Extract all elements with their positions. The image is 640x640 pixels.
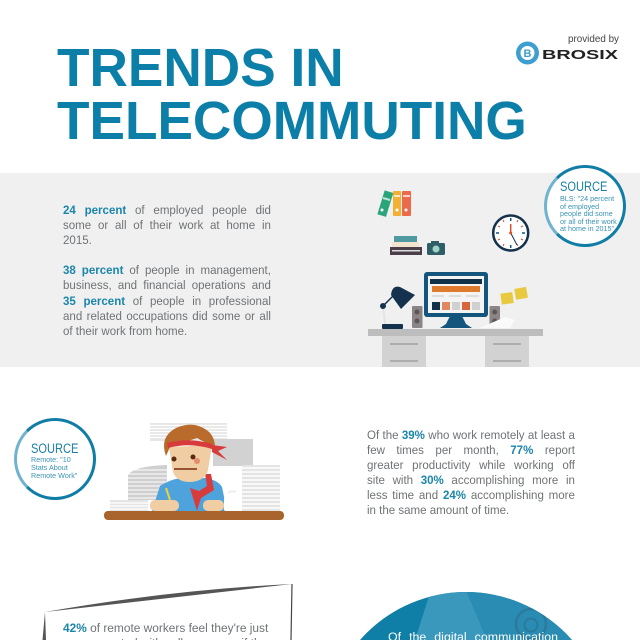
icon: desk lamp: [380, 287, 415, 329]
text block: 24 percent and 38 percent stats: [63, 203, 271, 338]
character head: [164, 425, 227, 482]
text block: 24 percent and 38 percent stats: some or all of their work at home in: [63, 218, 271, 232]
icon: computer monitor: [424, 272, 488, 328]
callout: source BLS: people did some: [560, 209, 613, 218]
text block: 39% productivity stats: site with 30% accomplishing more in: [367, 473, 575, 487]
desk top: [104, 511, 284, 520]
callout: source Remote: Remote Work": [31, 471, 77, 480]
callout: source Remote: SOURCE: [31, 441, 78, 456]
text block: 39% productivity stats: [367, 428, 575, 517]
callout: source Remote: Stats About: [31, 463, 68, 472]
callout: source BLS: or all of their work: [560, 216, 617, 226]
callout: source BLS: at home in 2015": [560, 224, 614, 233]
text block: 24 percent and 38 percent stats: 35 percent of people in professional: [63, 294, 271, 308]
icon: sticky notes: [500, 287, 528, 305]
logo: provided by Brosix: B: [524, 48, 532, 60]
character body: [150, 474, 227, 511]
title: TRENDS IN: [57, 38, 344, 98]
callout: source Remote: Remote: "10: [31, 455, 71, 464]
text block: 24 percent and 38 percent stats: 38 percent of people in management,: [63, 263, 271, 277]
paper stacks: [110, 423, 280, 511]
icon: binders: [377, 190, 411, 217]
coffee mug: [224, 491, 241, 511]
text block: 39% productivity stats: few times per month, 77% report: [367, 443, 575, 457]
illustration: office desk with monitor, shelves and clock: [368, 190, 543, 367]
text block: 24 percent and 38 percent stats: and related occupations did some or all: [63, 309, 271, 323]
text block: 24 percent and 38 percent stats: of their work from home.: [63, 324, 187, 338]
icon: paper on desk: [480, 317, 515, 328]
desk: [368, 329, 543, 367]
logo: provided by Brosix: BROSIX: [542, 47, 618, 62]
icon: wall clock: [493, 216, 528, 250]
title: TELECOMMUTING: [57, 90, 527, 150]
callout: source BLS: of employed: [560, 202, 599, 210]
text block: 24 percent and 38 percent stats: 24 percent of employed people did: [63, 203, 271, 217]
illustration: stressed worker at desk: [104, 423, 284, 520]
panel: paper card with 42% stat: [42, 584, 293, 640]
text block: 24 percent and 38 percent stats: business, and financial operations and: [63, 278, 271, 292]
logo: provided by Brosix: [516, 33, 620, 64]
text block: 39% productivity stats: in the same amount of time.: [367, 503, 509, 517]
title: [57, 38, 527, 150]
callout: source BLS: SOURCE: [560, 179, 607, 194]
text block: 39% productivity stats: less time and 24% accomplishing more: [367, 488, 575, 502]
text block: 39% productivity stats: Of the 39% who work remotely at least a: [367, 428, 575, 442]
band: grey section background: [0, 173, 640, 367]
callout: source BLS: BLS: "24 percent: [560, 194, 614, 203]
logo: provided by Brosix: provided by: [568, 33, 620, 45]
icon: speakers: [412, 306, 500, 328]
callout: source BLS: [544, 165, 626, 247]
icon: book stack and camera: [390, 236, 445, 255]
text: 42% of remote workers: 42% of remote workers feel they're just: [63, 621, 268, 635]
panel: blue circle with digital communication text: [360, 592, 572, 640]
text block: 39% productivity stats: greater productivity while working off: [367, 458, 575, 472]
callout: source Remote: [14, 418, 96, 500]
text block: 24 percent and 38 percent stats: 2015.: [63, 233, 92, 247]
